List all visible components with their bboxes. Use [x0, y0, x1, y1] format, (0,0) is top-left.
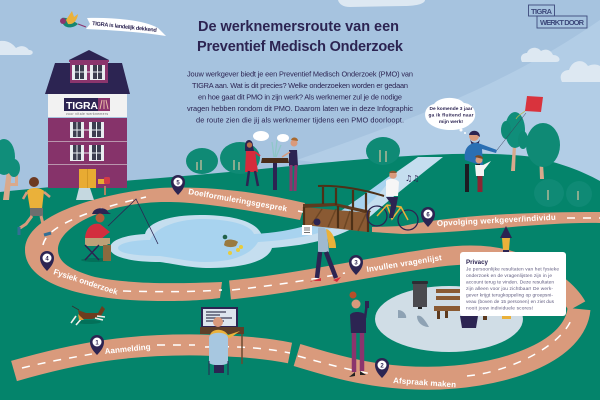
label: Afspraak maken: Afspraak maken — [393, 376, 456, 389]
pin 4: 4 — [45, 256, 49, 262]
intro text: vragen hebben rondom dit PMO. Daarom laten we in deze Infographic — [187, 104, 413, 113]
callout: privacy: Privacy — [466, 259, 489, 266]
pin 3 — [349, 255, 363, 275]
pin 2 — [375, 358, 389, 378]
callout: privacy — [460, 252, 566, 316]
litter bin — [412, 281, 428, 309]
pin 1: 1 — [95, 340, 99, 346]
pin 3: 3 — [354, 260, 358, 266]
man in navy — [282, 137, 298, 191]
person: cyclist: ♫♫ — [405, 174, 419, 183]
plaza — [375, 286, 523, 352]
clouds — [0, 0, 600, 82]
road labels — [52, 187, 556, 389]
bridge — [303, 186, 384, 232]
banner: bird with flag — [60, 11, 166, 36]
facade windows — [70, 122, 104, 161]
intro text: en hoe gaat dit PMO in zijn werk? Als werknemer zul je de nodige — [198, 92, 402, 102]
pin 4 — [40, 251, 54, 271]
green hill — [0, 154, 600, 400]
table with plant — [261, 140, 289, 190]
title: De werknemersroute van een — [198, 19, 399, 35]
pin 1 — [90, 335, 104, 355]
people at standing table — [245, 131, 298, 191]
logo: Tigra werkt door: TIGRA — [531, 7, 553, 16]
title — [197, 19, 404, 55]
duck with ducklings — [223, 235, 243, 255]
callout: privacy: veau (boven de 15 personen) en ziet dus — [466, 299, 555, 305]
callout: privacy: Je persoonlijke resultaten van het fysieke — [466, 266, 559, 272]
purple facade — [48, 118, 127, 188]
woman in red — [245, 140, 260, 186]
flag text: TIGRA is landelijk dekkend — [92, 21, 157, 34]
label: Invullen vragenlijst: Invullen vragenlijst — [366, 253, 443, 274]
intro text: Jouw werkgever biedt je een Preventief Medisch Onderzoek (PMO) van — [187, 70, 413, 78]
label: Doelformuleringsgesprek: Doelformuleringsgesprek — [188, 187, 288, 213]
person: woman with phone — [349, 292, 369, 377]
callout: privacy: nooit jouw individuele scores! — [466, 306, 533, 312]
intro text: TIGRA aan. Wat is dit precies? Welke onderzoeken worden er gedaan — [192, 81, 408, 90]
person: man flying kite with child — [465, 96, 543, 192]
pin 5: 5 — [176, 180, 180, 186]
pin 5 — [171, 175, 185, 195]
bench — [434, 289, 511, 328]
pin 6 — [421, 207, 435, 227]
dormer windows — [72, 65, 105, 80]
kite — [525, 96, 543, 112]
white sign band — [48, 94, 127, 117]
intro text: de route zien die jij als werknemer tijdens een PMO doorloopt. — [196, 116, 404, 124]
callout: privacy: gever krijgt terugkoppeling op groepsni- — [466, 292, 553, 298]
thought bubble: mijn werk! — [439, 119, 463, 125]
callout: privacy: onderzoek en de vragenlijsten zijn in je — [466, 273, 552, 279]
road dashes — [22, 197, 600, 376]
road: 3 — [230, 255, 577, 306]
pin 6: 6 — [426, 212, 430, 218]
pigeons — [398, 310, 429, 327]
dog — [71, 306, 105, 325]
speech balloons — [253, 131, 269, 141]
logo: Tigra werkt door — [528, 5, 587, 28]
thought bubble: ga ik fluitend naar — [428, 112, 474, 118]
road: 1 — [14, 345, 290, 371]
person: at desk with computer — [200, 307, 244, 375]
callout: privacy: account terug te vinden. Deze resultaten — [466, 280, 554, 286]
TIGRA logo: voor vitale werknemers — [66, 112, 108, 116]
person: runner — [19, 177, 51, 235]
thought bubble — [425, 98, 475, 134]
TIGRA logo: TIGRA — [66, 100, 98, 112]
road: 6 — [372, 212, 600, 234]
pin 2: 2 — [380, 364, 384, 370]
building: TIGRA office — [45, 50, 130, 200]
title: Preventief Medisch Onderzoek — [197, 39, 404, 55]
roof — [45, 63, 130, 94]
TIGRA logo — [64, 98, 110, 116]
tree: right pair — [501, 112, 560, 179]
logo: Tigra werkt door: WERKT DOOR — [540, 18, 585, 27]
person: fisherman — [81, 199, 158, 262]
road: 5 and 4 — [25, 188, 305, 301]
label: Opvolging werkgever/individu: Opvolging werkgever/individu — [437, 213, 556, 228]
tree: left edge — [0, 139, 20, 200]
lamp post — [500, 226, 512, 254]
trees and bushes — [0, 112, 592, 207]
thought bubble: De komende 3 jaar — [430, 106, 473, 112]
flag — [86, 18, 166, 36]
person: cyclist — [367, 171, 419, 230]
footpath — [76, 188, 94, 200]
intro text — [187, 70, 413, 124]
road: 2 — [297, 309, 579, 378]
bushes — [186, 137, 592, 207]
river and pond — [110, 157, 443, 268]
person: walking with backpack — [302, 218, 341, 282]
bird — [60, 11, 86, 27]
callout: privacy: zijn alleen voor jou zichtbaar! De werk- — [466, 286, 553, 292]
label: Aanmelding: Aanmelding — [104, 342, 151, 356]
mailbox — [98, 177, 110, 195]
label: Fysiek onderzoek: Fysiek onderzoek — [52, 267, 119, 297]
map pins — [40, 175, 435, 378]
door — [79, 169, 96, 188]
